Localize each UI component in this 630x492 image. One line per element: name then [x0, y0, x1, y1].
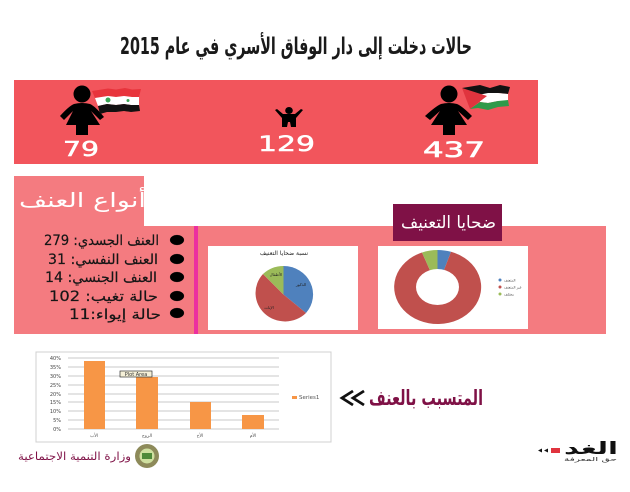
bar chart: cause of violence: الزوج	[142, 434, 152, 439]
pie chart: victims share: الأطفال	[270, 272, 282, 277]
bar chart: cause of violence: الأم	[250, 432, 256, 439]
chart legend	[498, 278, 522, 296]
logo: ministry of social development: وزارة التنمية الاجتماعية	[18, 450, 131, 463]
pie chart: victims share: نسبة ضحايا التعنيف	[260, 250, 308, 257]
logo: Al Ghad: حق المعرفة	[564, 457, 617, 463]
list item: shelter: حالة إيواء:11	[69, 307, 161, 323]
heading: victims of violence: ضحايا التعنيف	[401, 213, 496, 233]
chart legend: المتعنف	[504, 278, 516, 282]
bar chart: cause of violence	[36, 352, 331, 442]
text: count 129: 129	[258, 132, 315, 156]
pie chart: victims share	[208, 246, 358, 330]
bar chart: cause of violence: 35%	[50, 365, 61, 371]
panel: case counts	[14, 80, 538, 164]
bar chart: cause of violence: 40%	[50, 356, 61, 362]
pie chart: victims share: الذكور	[295, 282, 306, 287]
bar chart: cause of violence: Plot Area	[125, 372, 147, 378]
chart legend: مختلف	[504, 292, 514, 296]
list item: sexual: العنف الجنسي: 14	[45, 270, 157, 286]
heading: victims of violence	[393, 204, 502, 241]
bar chart: cause of violence: Series1	[299, 395, 319, 401]
panel: violence types and victims	[14, 176, 606, 334]
icon: woman with Jordanian flag	[425, 85, 510, 135]
list item: physical: العنف الجسدي: 279	[44, 233, 159, 249]
chart legend: غير المتعنف	[504, 286, 522, 290]
icon: child	[275, 107, 303, 127]
heading: violence types: أنواع العنف	[19, 187, 146, 212]
text: count 79: 79	[63, 137, 99, 161]
bar chart: cause of violence: 25%	[50, 383, 61, 389]
heading: cause of violence: المتسبب بالعنف	[369, 386, 483, 410]
text: count 437: 437	[423, 138, 485, 162]
bar chart: cause of violence: 15%	[50, 400, 61, 406]
list item: absence: حالة تغيب: 102	[49, 289, 158, 305]
bar chart: cause of violence: الأخ	[197, 432, 203, 439]
icon: woman with Syrian flag	[60, 86, 141, 135]
pie chart: victims share: الإناث	[264, 305, 274, 311]
bar chart: cause of violence: 10%	[50, 409, 61, 415]
list: violence types	[44, 233, 184, 323]
bar chart: cause of violence: 0%	[53, 427, 61, 433]
bar chart: cause of violence: الأب	[90, 432, 98, 439]
list item: psychological: العنف النفسي: 31	[48, 252, 158, 268]
bar chart: cause of violence: 30%	[50, 374, 61, 380]
bar chart: cause of violence: 5%	[53, 418, 61, 424]
logo: Al Ghad	[538, 439, 618, 463]
bar chart: cause of violence: 20%	[50, 392, 61, 398]
logo: Al Ghad: الغد	[564, 439, 618, 459]
logo: ministry of social development	[18, 444, 159, 468]
donut chart: victims	[378, 246, 528, 329]
arrow: double chevrons	[342, 391, 364, 405]
